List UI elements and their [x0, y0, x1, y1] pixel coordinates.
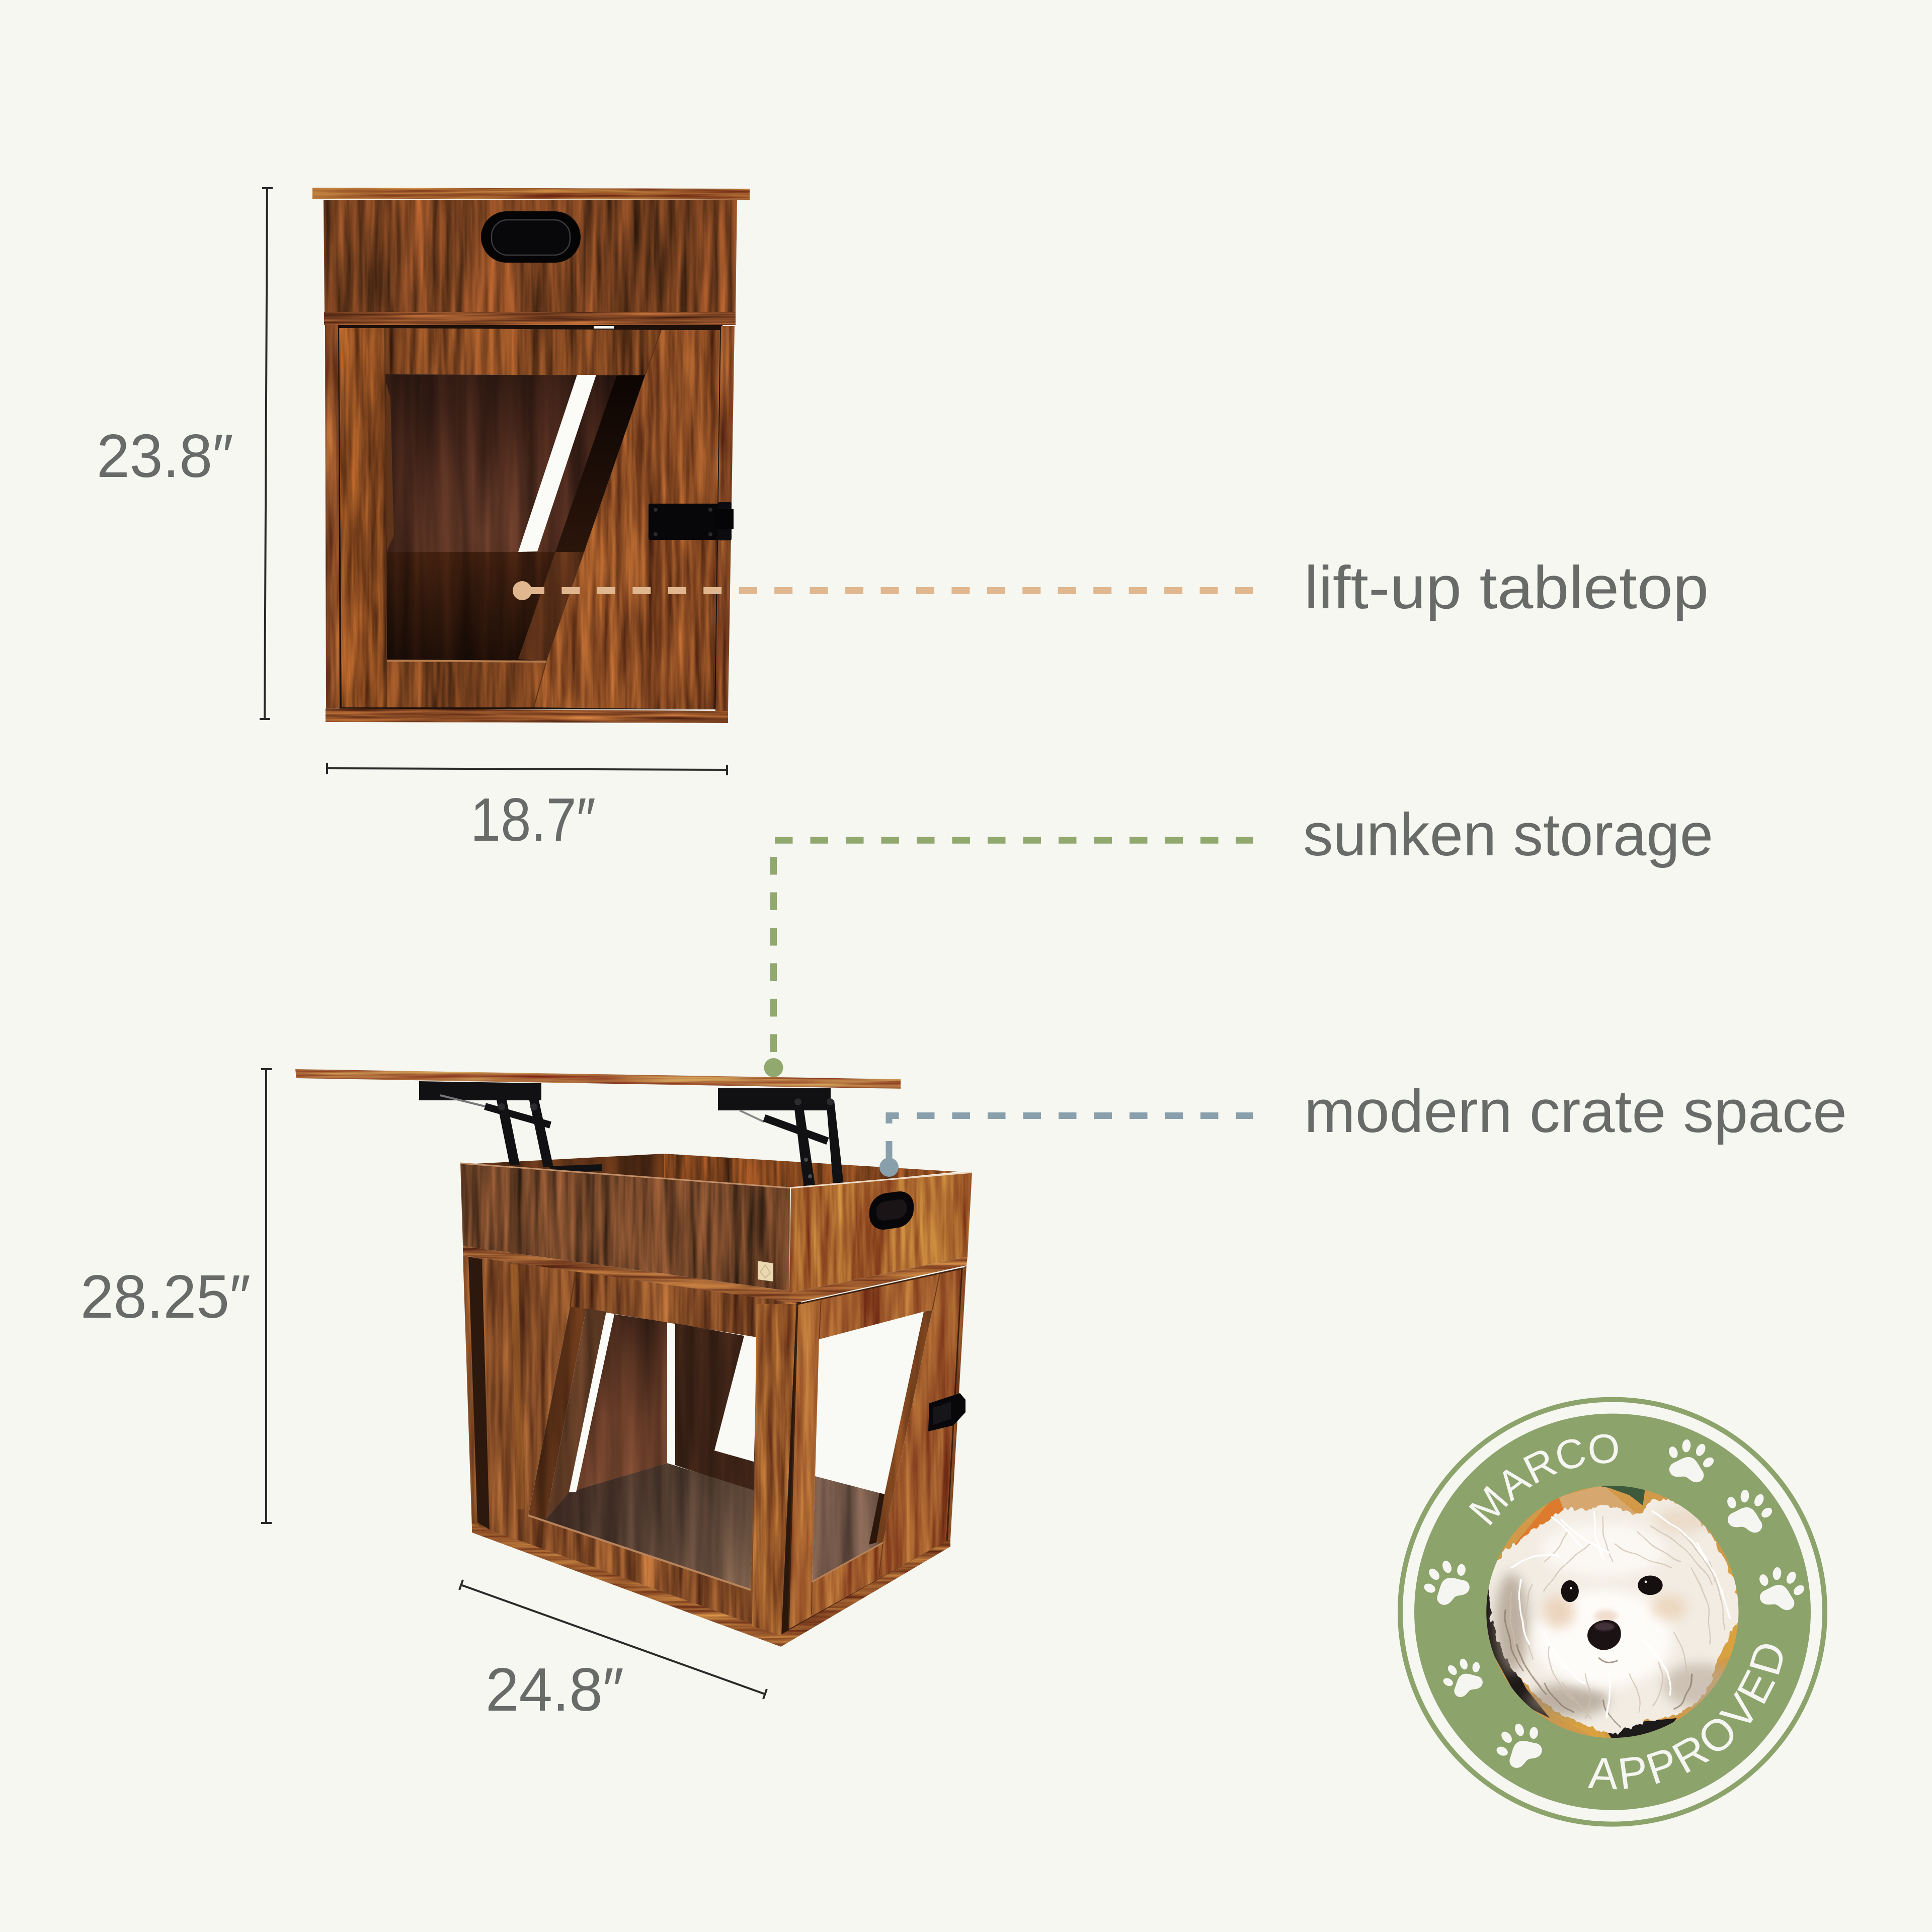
door side trim: [947, 1265, 967, 1542]
lit bevel behind acrylic: [518, 552, 584, 661]
callout: modern crate space: modern crate space: [1304, 1078, 1847, 1145]
dimension: height 28.25: 28.25″: [80, 1262, 251, 1331]
front lower face: [463, 1255, 796, 1636]
interior floor: [386, 552, 584, 661]
paw 2: [1719, 1485, 1778, 1537]
dimension: width 18.7: [327, 763, 727, 854]
dog photo illustration: [1482, 1483, 1745, 1745]
front bottom rail: [472, 1523, 781, 1647]
fur strands: [1510, 1517, 1724, 1718]
orange grain band: [510, 1264, 524, 1509]
paw 5: [1436, 1651, 1491, 1702]
product: front view closed crate: [312, 188, 750, 723]
eye left: [1561, 1580, 1579, 1602]
upper drawer panel: [324, 200, 737, 312]
door frame pieces: [339, 328, 720, 709]
black latch: [649, 502, 734, 540]
dimension: height 23.8: 23.8″: [97, 422, 233, 490]
door seams: [812, 1273, 940, 1614]
green disc: [1414, 1414, 1811, 1810]
paw prints: [1415, 1434, 1810, 1775]
fur shading: [1495, 1573, 1527, 1674]
paw 4: [1415, 1552, 1479, 1612]
door top rail: [385, 328, 661, 375]
badge text: MARCO: MARCO: [1469, 1434, 1618, 1525]
door bottom rail: [387, 660, 546, 707]
bottom rail: [326, 708, 728, 723]
lower lip: [387, 661, 546, 662]
door right panel: [534, 330, 720, 709]
paw 6: [1488, 1715, 1551, 1775]
left inner side: [386, 382, 394, 551]
raised tabletop: [295, 1069, 901, 1089]
front opening view: [528, 1307, 757, 1590]
front rail: [463, 1246, 789, 1303]
interior back wall: [386, 374, 645, 552]
dimension: depth 24.8: [459, 1580, 767, 1724]
door seams: [385, 328, 661, 707]
floor: [528, 1463, 754, 1590]
dark gap behind door: [337, 325, 722, 709]
badge text: APPROVED: APPROVED: [1588, 1644, 1783, 1789]
door window white: [812, 1310, 932, 1582]
door window lip: [812, 1543, 883, 1582]
see-through base: [528, 1307, 757, 1590]
side rail: [789, 1257, 968, 1304]
callout: sunken storage: [764, 801, 1713, 1077]
upper box front face: [460, 1163, 790, 1291]
side latch: [928, 1393, 965, 1431]
brown lower fur strands: [1505, 1609, 1692, 1727]
approved badge: [1398, 1397, 1827, 1827]
door dark strip: [869, 1493, 884, 1545]
upper box side face: [789, 1172, 972, 1293]
door left stile: [339, 328, 387, 707]
dark gap between post and door: [777, 1302, 801, 1639]
lower lip: [528, 1515, 751, 1590]
back wall left: [576, 1314, 667, 1492]
top highlight slit: [594, 326, 614, 329]
middle rail: [324, 312, 736, 325]
callout: sunken storage: sunken storage: [1303, 801, 1713, 868]
left lift hinge: [419, 1081, 602, 1172]
oval black handle: [481, 211, 581, 263]
callout: lift-up tabletop: lift-up tabletop: [1304, 554, 1709, 621]
infographic canvas: [84, 187, 1844, 1827]
left dark slot: [468, 1257, 490, 1530]
product: open crate with lifted top: [295, 1069, 972, 1647]
callout: lift-up tabletop: [513, 554, 1709, 621]
eye right: [1638, 1575, 1663, 1595]
right post: [715, 326, 735, 711]
dimension: height 23.8: [97, 188, 273, 719]
dimension: depth 24.8: 24.8″: [486, 1655, 624, 1724]
back wall right: [675, 1323, 754, 1492]
diagonal inner wall: [528, 1307, 586, 1519]
acrylic edge reflection stripe: [569, 1313, 614, 1492]
callout: modern crate space: [879, 1078, 1847, 1177]
head fur: [1488, 1499, 1742, 1733]
door window floor: [812, 1476, 884, 1582]
side door: [788, 1265, 967, 1630]
muzzle tint: [1594, 1610, 1618, 1623]
mouth: [1598, 1658, 1618, 1662]
interior back walls: [465, 1154, 958, 1188]
diagonal front seam: [570, 1275, 575, 1307]
side handle: [869, 1189, 914, 1232]
side bottom rail: [781, 1539, 950, 1647]
dark strip behind acrylic: [555, 375, 645, 552]
dimension: width 18.7: 18.7″: [470, 785, 596, 854]
corner post seam: [752, 1304, 796, 1636]
right lift hinge: [718, 1088, 844, 1188]
door diagonal bevel: [876, 1310, 932, 1543]
tabletop slab: [312, 188, 750, 200]
rim highlight: [460, 1163, 972, 1188]
white reflection stripe: [518, 375, 596, 552]
paw 1: [1660, 1434, 1720, 1486]
crate window: [386, 374, 645, 662]
outer ring: [1400, 1400, 1825, 1824]
nose: [1587, 1620, 1621, 1650]
brand tag: [758, 1261, 773, 1281]
paw 3: [1751, 1562, 1810, 1614]
acrylic panel: [546, 1309, 606, 1519]
door outline: [788, 1268, 962, 1630]
left post: [325, 325, 340, 708]
